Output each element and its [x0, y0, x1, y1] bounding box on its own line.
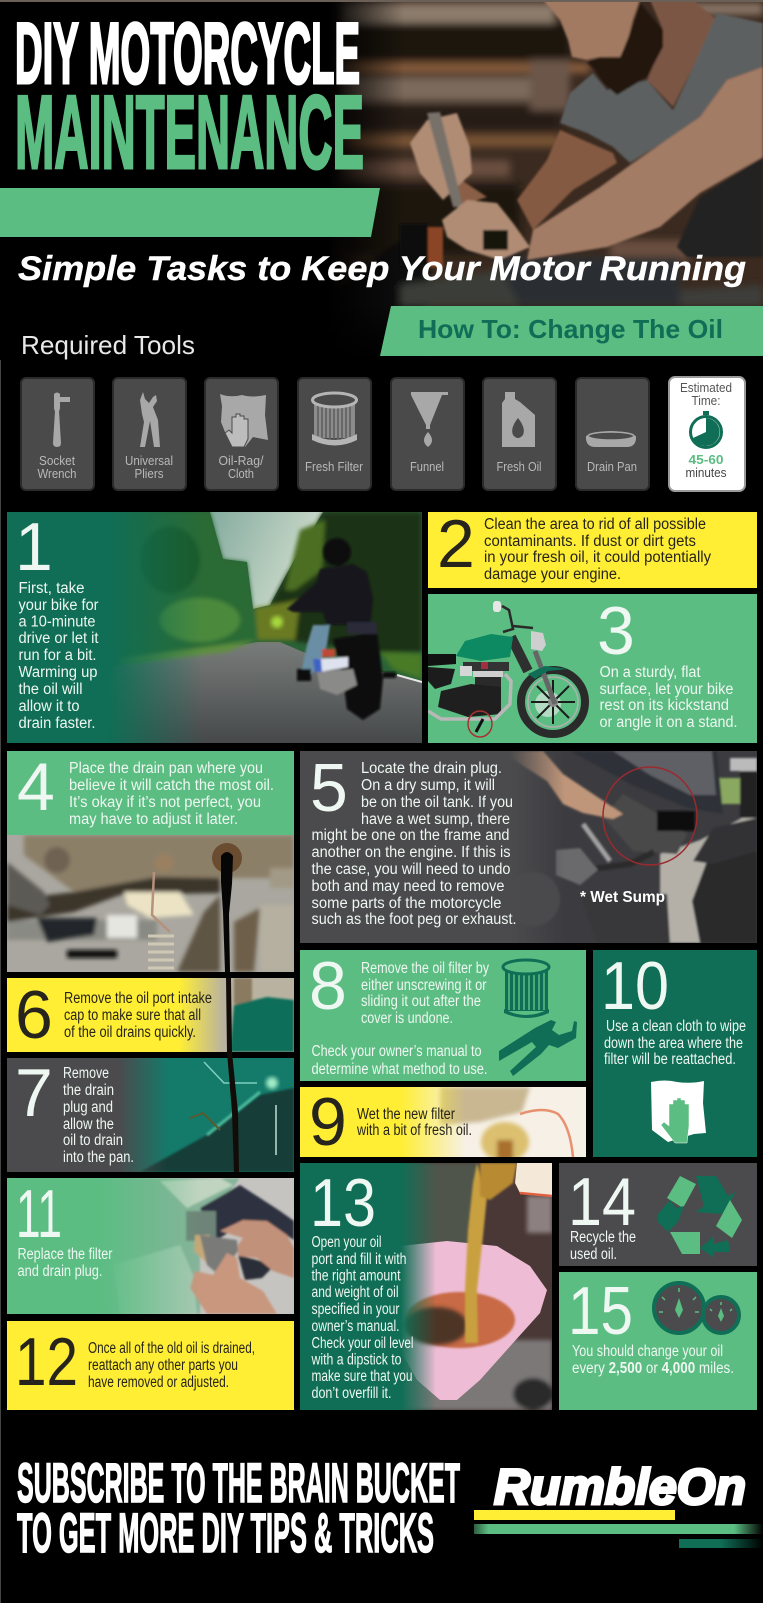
number 5: 5	[310, 750, 348, 826]
text: step 13: Open your oil	[312, 1234, 382, 1251]
text: step 15	[572, 1343, 734, 1377]
text: step 5: some parts of the motorcycle	[312, 895, 502, 912]
text: step 11	[18, 1246, 112, 1280]
panel: step 8	[300, 948, 586, 1081]
number 10: 10	[601, 948, 669, 1024]
panel: step 2	[428, 506, 757, 588]
footer call to action	[17, 1451, 460, 1564]
photo: drain plug location	[514, 751, 757, 943]
tool: drain pan: Drain Pan	[587, 459, 637, 474]
panel: step 5	[300, 750, 757, 943]
icon: pliers	[499, 1020, 577, 1076]
number 4: 4	[17, 749, 55, 825]
tool: oil rag: Cloth	[228, 466, 254, 481]
tool: universal pliers: Universal	[125, 453, 173, 468]
text: step 4: Place the drain pan where you	[69, 760, 263, 777]
text: step 2: contaminants. If dust or dirt gets	[484, 533, 696, 550]
text: step 6: of the oil drains quickly.	[64, 1024, 196, 1041]
number 12: 12	[15, 1324, 78, 1400]
text: step 3: rest on its kickstand	[600, 697, 729, 714]
tools row	[21, 377, 745, 491]
panel: step 10	[593, 948, 757, 1157]
number 15: 15	[568, 1273, 633, 1349]
text: step 7	[63, 1065, 134, 1166]
text: step 15: You should change your oil	[572, 1343, 723, 1360]
text: step 8: cover is undone.	[361, 1010, 453, 1027]
text: step 5: have a wet sump, there	[361, 811, 510, 828]
text: step 7: oil to drain	[63, 1132, 123, 1149]
subtitle: Simple Tasks to Keep Your Motor Running	[18, 250, 746, 288]
motorcycle illustration	[428, 601, 585, 737]
text: step 4: believe it will catch the most oil.	[69, 777, 274, 794]
text: step 13: Check your oil level	[312, 1335, 414, 1352]
text: step 6	[64, 990, 212, 1041]
callout: wet sump: * Wet Sump	[580, 889, 665, 906]
tool: universal pliers: Pliers	[134, 466, 164, 481]
text: step 13: port and fill it with	[312, 1251, 406, 1268]
text: step 4: It’s okay if it’s not perfect, you	[69, 794, 261, 811]
tool: drain pan	[576, 378, 649, 490]
text: step 4: may have to adjust it later.	[69, 811, 238, 828]
text: step 11: Replace the filter	[18, 1246, 112, 1263]
panel: step 7	[7, 1055, 294, 1172]
text: step 3: surface, let your bike	[600, 681, 734, 698]
icon: hand wiping with cloth	[651, 1080, 706, 1143]
text: step 14: used oil.	[570, 1246, 617, 1263]
text: step 8: Remove the oil filter by	[361, 960, 489, 977]
text: step 1: your bike for	[18, 597, 98, 614]
how-to banner	[380, 306, 763, 356]
text: step 11: and drain plug.	[18, 1263, 102, 1280]
text: step 10	[604, 1018, 746, 1068]
text: step 5	[312, 760, 516, 928]
text: step 5: such as the foot peg or exhaust.	[312, 911, 516, 928]
estimated time card: Time:	[692, 393, 720, 408]
number 2: 2	[437, 506, 475, 582]
text: step 12	[88, 1340, 255, 1391]
logo: RumbleOn	[474, 1459, 763, 1548]
text: step 7: the drain	[63, 1082, 114, 1099]
text: step 1: First, take	[18, 580, 84, 597]
panel: step 12	[7, 1321, 294, 1410]
text: step 12: have removed or adjusted.	[88, 1374, 229, 1391]
text: step 7: Remove	[63, 1065, 109, 1082]
number 6: 6	[15, 977, 53, 1053]
text: step 3	[600, 664, 738, 731]
text: step 7: allow the	[63, 1116, 114, 1133]
text: step 2	[484, 516, 711, 583]
text: step 9	[356, 1106, 472, 1139]
text: step 1: Warming up	[18, 664, 98, 681]
text: step 14: Recycle the	[570, 1229, 636, 1246]
tool: funnel: Funnel	[410, 459, 444, 474]
text: step 1: run for a bit.	[18, 647, 96, 664]
infographic: MAINTENANCE	[15, 75, 364, 191]
text: step 5: might be one on the frame and	[312, 827, 510, 844]
how-to banner: How To: Change The Oil	[418, 314, 723, 344]
text: step 5: both and may need to remove	[312, 878, 504, 895]
text: step 10: filter will be reattached.	[604, 1051, 736, 1068]
photo: oil draining from engine	[7, 835, 294, 972]
green title bar	[0, 188, 380, 237]
text: step 13: don’t overfill it.	[312, 1385, 392, 1402]
text: step 9: Wet the new filter	[357, 1106, 455, 1123]
number 13: 13	[310, 1165, 376, 1241]
panel: step 1	[7, 509, 422, 743]
number 1: 1	[15, 509, 53, 585]
text: step 1: drive or let it	[18, 630, 99, 647]
icon: gauges	[654, 1283, 739, 1333]
text: step 8: sliding it out after the	[361, 993, 481, 1010]
panel: step 9	[300, 1087, 586, 1157]
tool: fresh oil: Fresh Oil	[496, 459, 542, 474]
text: step 13: make sure that you	[312, 1368, 412, 1385]
tool: fresh filter	[298, 378, 371, 490]
text: step 13: the right amount	[312, 1268, 401, 1284]
text: step 5: the case, you will need to undo	[312, 861, 510, 878]
text: step 13: and weight of oil	[312, 1284, 398, 1301]
text: step 12: reattach any other parts you	[88, 1357, 238, 1374]
icon: recycle	[658, 1176, 742, 1258]
text: step 1: drain faster.	[18, 715, 96, 732]
number 14: 14	[568, 1164, 636, 1240]
text: step 1: a 10-minute	[18, 614, 96, 630]
number 3: 3	[597, 593, 635, 669]
panel: step 11	[7, 1176, 294, 1314]
estimated time card: Estimated	[680, 380, 732, 395]
text: step 5: be on the oil tank. If you	[361, 794, 513, 811]
text: step 5: another on the engine. If this is	[312, 844, 511, 861]
tool: oil rag	[205, 378, 278, 490]
text: step 6: cap to make sure that all	[64, 1007, 201, 1024]
panel: step 3	[428, 593, 757, 743]
text: step 5: Locate the drain plug.	[361, 760, 502, 777]
text: step 8	[312, 960, 489, 1078]
number 8: 8	[309, 948, 347, 1024]
text: step 7: plug and	[63, 1099, 113, 1116]
text: step 5: On a dry sump, it will	[361, 777, 495, 794]
tool: fresh oil	[483, 378, 556, 490]
text: step 13	[311, 1234, 414, 1402]
text: step 3: On a sturdy, flat	[600, 664, 701, 681]
text: step 2: damage your engine.	[484, 566, 621, 583]
text: step 14	[570, 1229, 636, 1263]
panel: step 4	[7, 749, 294, 972]
title	[15, 6, 364, 191]
oil stream across steps 6 and 7	[226, 978, 239, 1172]
required tools heading: Required Tools	[21, 330, 195, 360]
panel: step 14	[559, 1163, 757, 1266]
panel: step 13	[300, 1163, 553, 1410]
tool: fresh filter: Fresh Filter	[305, 459, 364, 474]
number 11: 11	[16, 1176, 62, 1252]
hero photo: mechanic at work	[0, 0, 763, 360]
panel: step 15	[559, 1272, 757, 1410]
logo: RumbleOn: RumbleOn	[494, 1459, 746, 1515]
text: step 13: with a dipstick to	[311, 1352, 402, 1368]
tool: oil rag: Oil-Rag/	[218, 453, 264, 468]
text: step 13: specified in your	[312, 1301, 400, 1318]
text: step 8: determine what method to use.	[312, 1061, 488, 1078]
text: step 1: allow it to	[18, 698, 80, 715]
text: step 9: with a bit of fresh oil.	[356, 1122, 472, 1139]
text: step 2: Clean the area to rid of all possible	[484, 516, 706, 533]
estimated time card	[669, 377, 745, 491]
text: step 1	[18, 580, 99, 732]
estimated time card: 45-60	[688, 452, 724, 467]
text: step 6: Remove the oil port intake	[64, 990, 212, 1007]
text: step 15: every 2,500 or 4,000 miles.	[572, 1360, 734, 1377]
text: step 8: either unscrewing it or	[361, 977, 486, 994]
text: step 7: into the pan.	[63, 1149, 134, 1166]
panel: step 6	[7, 977, 294, 1053]
text: step 4	[69, 760, 274, 828]
text: step 2: in your fresh oil, it could potentially	[484, 549, 711, 566]
text: step 8: Check your owner’s manual to	[312, 1043, 482, 1060]
tool: socket wrench	[21, 378, 94, 490]
text: step 12: Once all of the old oil is drained,	[88, 1340, 255, 1357]
text: step 3: or angle it on a stand.	[600, 714, 738, 731]
tool: funnel	[391, 378, 464, 490]
text: step 1: the oil will	[18, 681, 82, 698]
photo: rider on forest road	[7, 512, 422, 743]
tool: socket wrench: Socket	[39, 453, 75, 468]
number 9: 9	[309, 1084, 347, 1160]
icon: oil filter	[503, 960, 549, 1018]
text: step 13: owner’s manual.	[312, 1318, 400, 1335]
tool: socket wrench: Wrench	[38, 466, 76, 481]
estimated time card: minutes	[686, 465, 727, 480]
number 7: 7	[15, 1055, 53, 1131]
tool: universal pliers	[113, 378, 186, 490]
